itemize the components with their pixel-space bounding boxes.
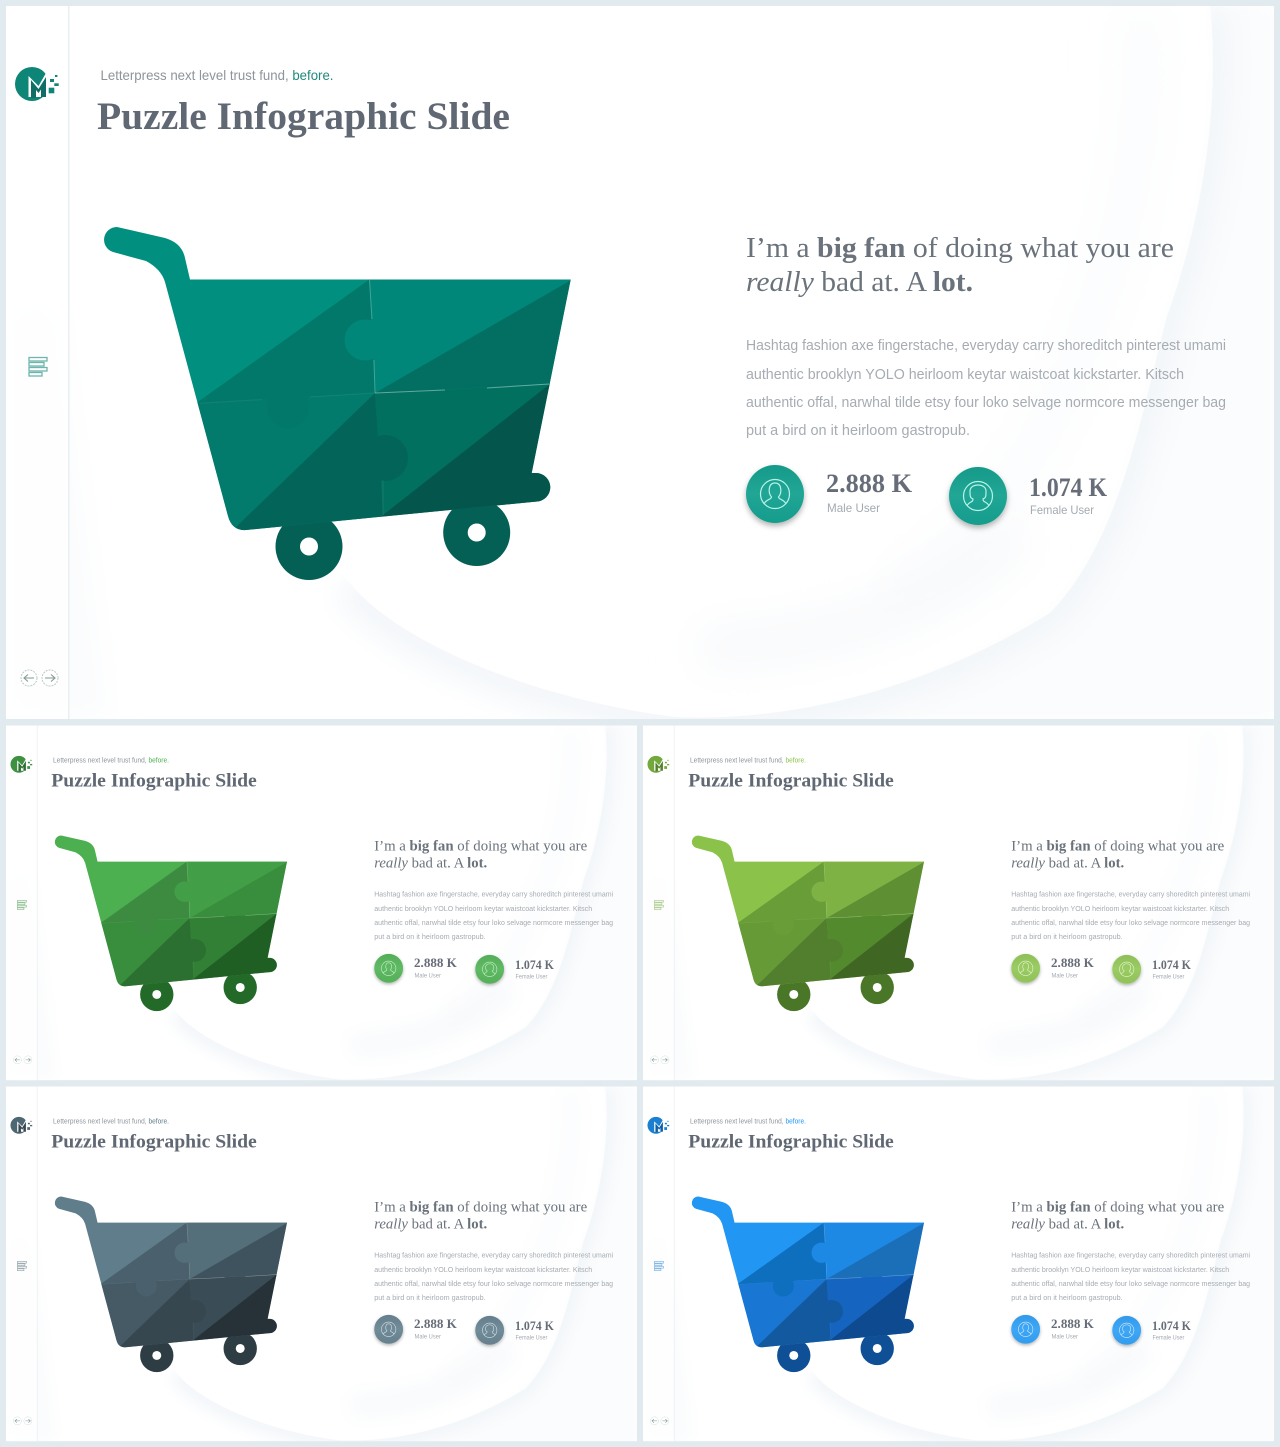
headline second line: really bad at. A lot. [1011,1216,1124,1232]
icon: puzzle shopping cart [50,832,297,1011]
icon: menu [654,900,663,910]
stat: male user [746,465,913,523]
icon: menu [654,1261,663,1271]
stat: male user: Male User [1052,973,1078,979]
body text: authentic brooklyn YOLO heirloom keytar waistcoat kickstarter. Kitsch [1011,904,1229,913]
panel: green slide [6,725,637,1080]
body text [374,890,613,941]
body text: Hashtag fashion axe fingerstache, everyday carry shoreditch pinterest umami [746,338,1226,354]
title: Puzzle Infographic Slide [688,771,894,792]
stat: female user: Female User [516,1335,547,1341]
stat: female user: 1.074 K [515,957,554,972]
body text [1011,1251,1250,1302]
panel: lime slide [643,725,1274,1080]
logo [647,756,669,773]
headline: I’m a big fan of doing what you are [746,232,1174,264]
body text: Hashtag fashion axe fingerstache, everyday carry shoreditch pinterest umami [1011,1251,1250,1260]
title: Puzzle Infographic Slide [688,1132,894,1153]
body text: authentic brooklyn YOLO heirloom keytar waistcoat kickstarter. Kitsch [746,367,1184,383]
icon: puzzle shopping cart [687,1193,934,1372]
stat: female user [475,1316,554,1345]
headline second line: really bad at. A lot. [1011,855,1124,871]
headline second line: really bad at. A lot. [374,855,487,871]
headline second line: really bad at. A lot. [746,266,973,298]
stat: male user: Male User [415,1334,441,1340]
body text: put a bird on it heirloom gastropub. [374,1293,486,1302]
body text: put a bird on it heirloom gastropub. [746,423,970,439]
stat: female user: 1.074 K [1152,957,1191,972]
stat: female user [949,467,1108,525]
subtitle: Letterpress next level trust fund, before. [53,1118,169,1125]
body text: authentic offal, narwhal tilde etsy four loko selvage normcore messenger bag [1011,1279,1250,1288]
title: Puzzle Infographic Slide [97,95,510,138]
stat: male user: Male User [415,973,441,979]
stat: male user [374,1315,457,1344]
stat: male user: 2.888 K [1051,1316,1094,1331]
stat: female user: Female User [1153,1335,1184,1341]
panel: blue slide [643,1086,1274,1441]
stat: female user: Female User [1153,974,1184,980]
stat: male user: 2.888 K [1051,955,1094,970]
icon: puzzle shopping cart [687,832,934,1011]
panel: slate slide [6,1086,637,1441]
stat: female user: Female User [516,974,547,980]
icon: puzzle shopping cart [50,1193,297,1372]
body text: authentic offal, narwhal tilde etsy four loko selvage normcore messenger bag [1011,918,1250,927]
body text: authentic brooklyn YOLO heirloom keytar waistcoat kickstarter. Kitsch [374,1265,592,1274]
subtitle: Letterpress next level trust fund, before. [100,67,334,83]
title: Puzzle Infographic Slide [51,1132,257,1153]
stat: female user: 1.074 K [1152,1318,1191,1333]
icon: navigation arrows [650,1417,669,1425]
icon: navigation arrows [650,1056,669,1064]
stat: female user: Female User [1030,503,1094,517]
panel: main teal slide [6,6,1274,719]
body text: authentic brooklyn YOLO heirloom keytar waistcoat kickstarter. Kitsch [374,904,592,913]
stat: female user [475,955,554,984]
body text: Hashtag fashion axe fingerstache, everyday carry shoreditch pinterest umami [1011,890,1250,899]
icon: menu [17,900,26,910]
headline: I’m a big fan of doing what you are [1011,1199,1224,1215]
stat: male user: Male User [827,501,880,515]
icon: navigation arrows [21,670,58,686]
body text: authentic offal, narwhal tilde etsy four loko selvage normcore messenger bag [374,1279,613,1288]
icon: navigation arrows [13,1056,32,1064]
stat: male user: 2.888 K [414,955,457,970]
icon: puzzle shopping cart [95,220,590,580]
stat: female user [1112,1316,1191,1345]
stat: male user: Male User [1052,1334,1078,1340]
body text: Hashtag fashion axe fingerstache, everyday carry shoreditch pinterest umami [374,890,613,899]
stat: female user: 1.074 K [515,1318,554,1333]
logo [647,1117,669,1134]
logo [15,67,59,102]
headline: I’m a big fan of doing what you are [1011,838,1224,854]
subtitle: Letterpress next level trust fund, before. [690,757,806,764]
stat: male user [1011,954,1094,983]
stat: female user [1112,955,1191,984]
stat: male user: 2.888 K [826,469,913,498]
body text: put a bird on it heirloom gastropub. [1011,1293,1123,1302]
body text: authentic brooklyn YOLO heirloom keytar waistcoat kickstarter. Kitsch [1011,1265,1229,1274]
body text: put a bird on it heirloom gastropub. [1011,932,1123,941]
icon: menu [29,358,47,376]
title: Puzzle Infographic Slide [51,771,257,792]
body text: authentic offal, narwhal tilde etsy four loko selvage normcore messenger bag [746,395,1226,411]
logo [10,1117,32,1134]
body text [374,1251,613,1302]
body text [746,338,1226,439]
icon: navigation arrows [13,1417,32,1425]
body text [1011,890,1250,941]
stat: female user: 1.074 K [1029,473,1108,502]
logo [10,756,32,773]
headline: I’m a big fan of doing what you are [374,1199,587,1215]
stat: male user [1011,1315,1094,1344]
body text: put a bird on it heirloom gastropub. [374,932,486,941]
headline: I’m a big fan of doing what you are [374,838,587,854]
stat: male user [374,954,457,983]
icon: menu [17,1261,26,1271]
stat: male user: 2.888 K [414,1316,457,1331]
headline second line: really bad at. A lot. [374,1216,487,1232]
subtitle: Letterpress next level trust fund, before. [690,1118,806,1125]
body text: Hashtag fashion axe fingerstache, everyday carry shoreditch pinterest umami [374,1251,613,1260]
body text: authentic offal, narwhal tilde etsy four loko selvage normcore messenger bag [374,918,613,927]
subtitle: Letterpress next level trust fund, before. [53,757,169,764]
